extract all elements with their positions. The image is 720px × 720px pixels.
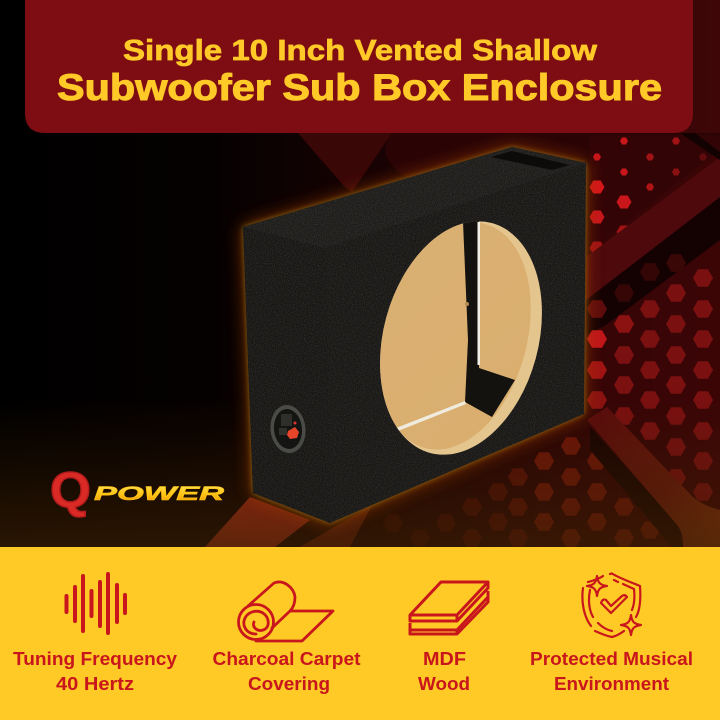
feature: tuning frequency: Tuning Frequency bbox=[13, 649, 177, 669]
feature: protected: Environment bbox=[554, 674, 669, 694]
logo: Q Power: POWER bbox=[94, 484, 225, 505]
feature: MDF bbox=[410, 582, 488, 694]
feature: MDF: Wood bbox=[418, 674, 470, 694]
feature: carpet: Covering bbox=[248, 674, 330, 694]
logo: Q Power bbox=[50, 462, 225, 518]
dark band behind hexagons bbox=[586, 197, 720, 335]
title: Subwoofer Sub Box Enclosure bbox=[57, 67, 662, 108]
feature: protected bbox=[530, 574, 693, 694]
feature: tuning frequency bbox=[13, 574, 177, 694]
background: dark red gradient with diagonal bands and hexagons bbox=[0, 0, 720, 547]
features panel bbox=[0, 547, 720, 720]
hexagon field: bright upper dots bbox=[590, 138, 707, 254]
speaker hole bbox=[380, 221, 542, 455]
box glow bbox=[243, 147, 586, 523]
icon: sound wave bbox=[66, 574, 125, 633]
vent opening bbox=[491, 151, 570, 170]
internal vent channel bbox=[463, 220, 515, 417]
header banner bbox=[25, 0, 693, 133]
lower-left red bands bbox=[205, 497, 310, 547]
icon: carpet roll bbox=[238, 582, 333, 641]
feature: carpet bbox=[212, 582, 361, 694]
icon: stacked boards bbox=[410, 582, 488, 634]
terminal cup bbox=[268, 403, 308, 455]
hexagon field: right area bbox=[587, 254, 713, 501]
hexagon field: dim lower area bbox=[383, 437, 660, 547]
feature: MDF: MDF bbox=[423, 649, 466, 669]
title bbox=[57, 35, 662, 108]
feature: protected: Protected Musical bbox=[530, 649, 693, 669]
icon: shield with check bbox=[582, 574, 641, 637]
logo: Q Power: Q bbox=[50, 462, 91, 518]
diagonal band upper right bbox=[586, 157, 720, 300]
feature: tuning frequency: 40 Hertz bbox=[56, 674, 134, 694]
diagonal band lower right bbox=[590, 427, 683, 547]
product: subwoofer box bbox=[243, 147, 586, 523]
feature: carpet: Charcoal Carpet bbox=[212, 649, 361, 669]
title: Single 10 Inch Vented Shallow bbox=[123, 35, 597, 67]
